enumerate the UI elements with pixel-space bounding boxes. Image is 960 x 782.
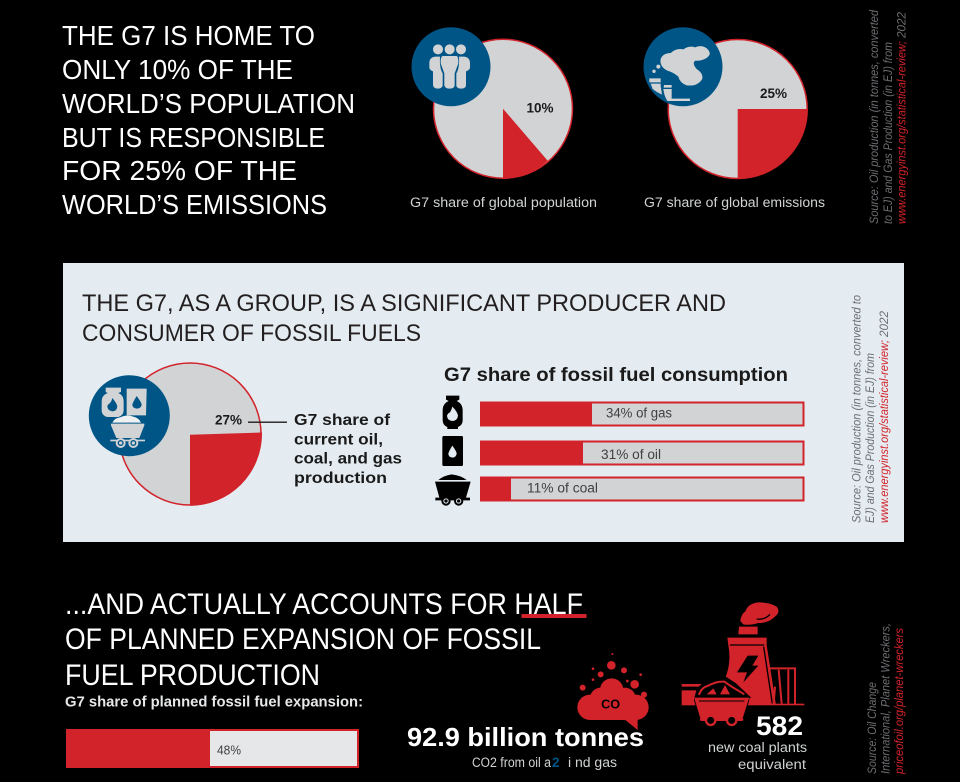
heading: G7 population and emissions (62, 20, 355, 220)
heading: G7 population and emissions: WORLD’S POPULATION (62, 88, 355, 119)
bar heading: planned expansion: G7 share of planned fossil fuel expansion: (65, 694, 363, 710)
bar: gas: 34% of gas (606, 406, 672, 420)
pie chart: G7 share of global population (434, 39, 572, 179)
icon: people (412, 27, 490, 106)
stat: billion tonnes: 92.9 billion tonnes (407, 722, 644, 752)
heading: G7 population and emissions: BUT IS RESPONSIBLE (62, 122, 325, 153)
caption: CO2 from oil and gas: 2 (552, 755, 560, 770)
icon: CO2 cloud (577, 653, 649, 730)
stat: new coal plants: equivalent (738, 757, 806, 772)
pie chart: G7 share of global emissions (668, 40, 808, 179)
stat: new coal plants: 582 (756, 711, 803, 741)
caption: CO2 from oil and gas: CO (472, 755, 490, 770)
chart heading: fossil fuel consumption: G7 share of fossil fuel consumption (444, 364, 788, 386)
label: share of current production (294, 412, 402, 487)
bar: planned expansion 48% (66, 729, 358, 768)
caption: CO2 from oil and gas: 2 from oil a (490, 755, 551, 770)
source note: emissions (867, 10, 908, 224)
panel heading (82, 290, 726, 347)
caption: global emissions: G7 share of global emissions (644, 195, 825, 210)
stat: new coal plants (708, 711, 807, 772)
pie chart: G7 share of global emissions: 25% (760, 86, 787, 101)
heading: half of planned expansion: OF PLANNED EXPANSION OF FOSSIL (65, 623, 541, 656)
label: share of current production: G7 share of (294, 412, 391, 429)
source note: Oil Change International: Source: Oil Change (865, 682, 879, 774)
underline: half (522, 614, 586, 618)
icon: coal power plant (682, 602, 804, 725)
heading: G7 population and emissions: WORLD’S EMISSIONS (62, 189, 327, 220)
pie chart: share of oil, coal and gas production (119, 363, 287, 506)
heading: G7 population and emissions: ONLY 10% OF THE (62, 54, 293, 85)
bar: coal: 11% of coal (527, 480, 598, 496)
caption: global population: G7 share of global population (410, 195, 597, 210)
source note: emissions: www.energyinst.org/statistical-review; (894, 41, 908, 224)
bar: gas (480, 402, 804, 426)
pie chart: G7 share of global population: 10% (526, 100, 554, 116)
panel heading: CONSUMER OF FOSSIL FUELS (82, 320, 421, 347)
panel: fossil fuel producer and consumer (63, 263, 904, 542)
bar: planned expansion 48%: 48% (217, 744, 241, 758)
heading: G7 population and emissions: FOR 25% OF THE (62, 155, 297, 186)
label: share of current production: current oil, (294, 432, 383, 448)
bar: oil: 31% of oil (601, 447, 661, 462)
heading: G7 population and emissions: THE G7 IS HOME TO (62, 20, 315, 51)
icon: gas, oil and coal (89, 375, 170, 456)
bar: coal (480, 476, 804, 502)
source note: production (850, 295, 891, 523)
source note: production: 2022 (877, 311, 891, 338)
pie chart: share of oil, coal and gas production: 27% (215, 412, 242, 428)
source note: production: EJ) and Gas Production (in EJ) from (863, 353, 877, 523)
source note: emissions: 2022 (894, 12, 908, 39)
icon: oil barrel (442, 436, 463, 466)
source note: emissions: to EJ) and Gas Production (in EJ) from (881, 42, 895, 224)
icon: smokestack (644, 27, 722, 106)
heading: half of planned expansion: ...AND ACTUALLY ACCOUNTS FOR HALF (65, 588, 583, 621)
stat: new coal plants: new coal plants (708, 740, 807, 755)
source note: production: www.energyinst.org/statistical-review; (877, 340, 891, 523)
source note: Oil Change International (865, 623, 906, 775)
caption: CO2 from oil and gas (472, 755, 617, 770)
bar: oil (480, 440, 804, 466)
label: share of current production: coal, and gas (294, 450, 402, 468)
label: share of current production: production (294, 470, 387, 487)
heading: half of planned expansion: FUEL PRODUCTION (65, 659, 320, 692)
heading: half of planned expansion (65, 588, 583, 692)
panel heading: THE G7, AS A GROUP, IS A SIGNIFICANT PRODUCER AND (82, 290, 726, 317)
caption: CO2 from oil and gas: i nd gas (568, 755, 617, 770)
source note: production: Source: Oil production (in tonnes, converted to (850, 295, 864, 523)
icon: gas cylinder (443, 396, 463, 429)
icon: CO2 cloud: CO (601, 698, 620, 712)
icon: coal cart (435, 474, 471, 506)
source note: Oil Change International: International, Planet Wreckers, (878, 623, 892, 774)
source note: Oil Change International: priceofoil.org/planet-wreckers (892, 628, 906, 775)
